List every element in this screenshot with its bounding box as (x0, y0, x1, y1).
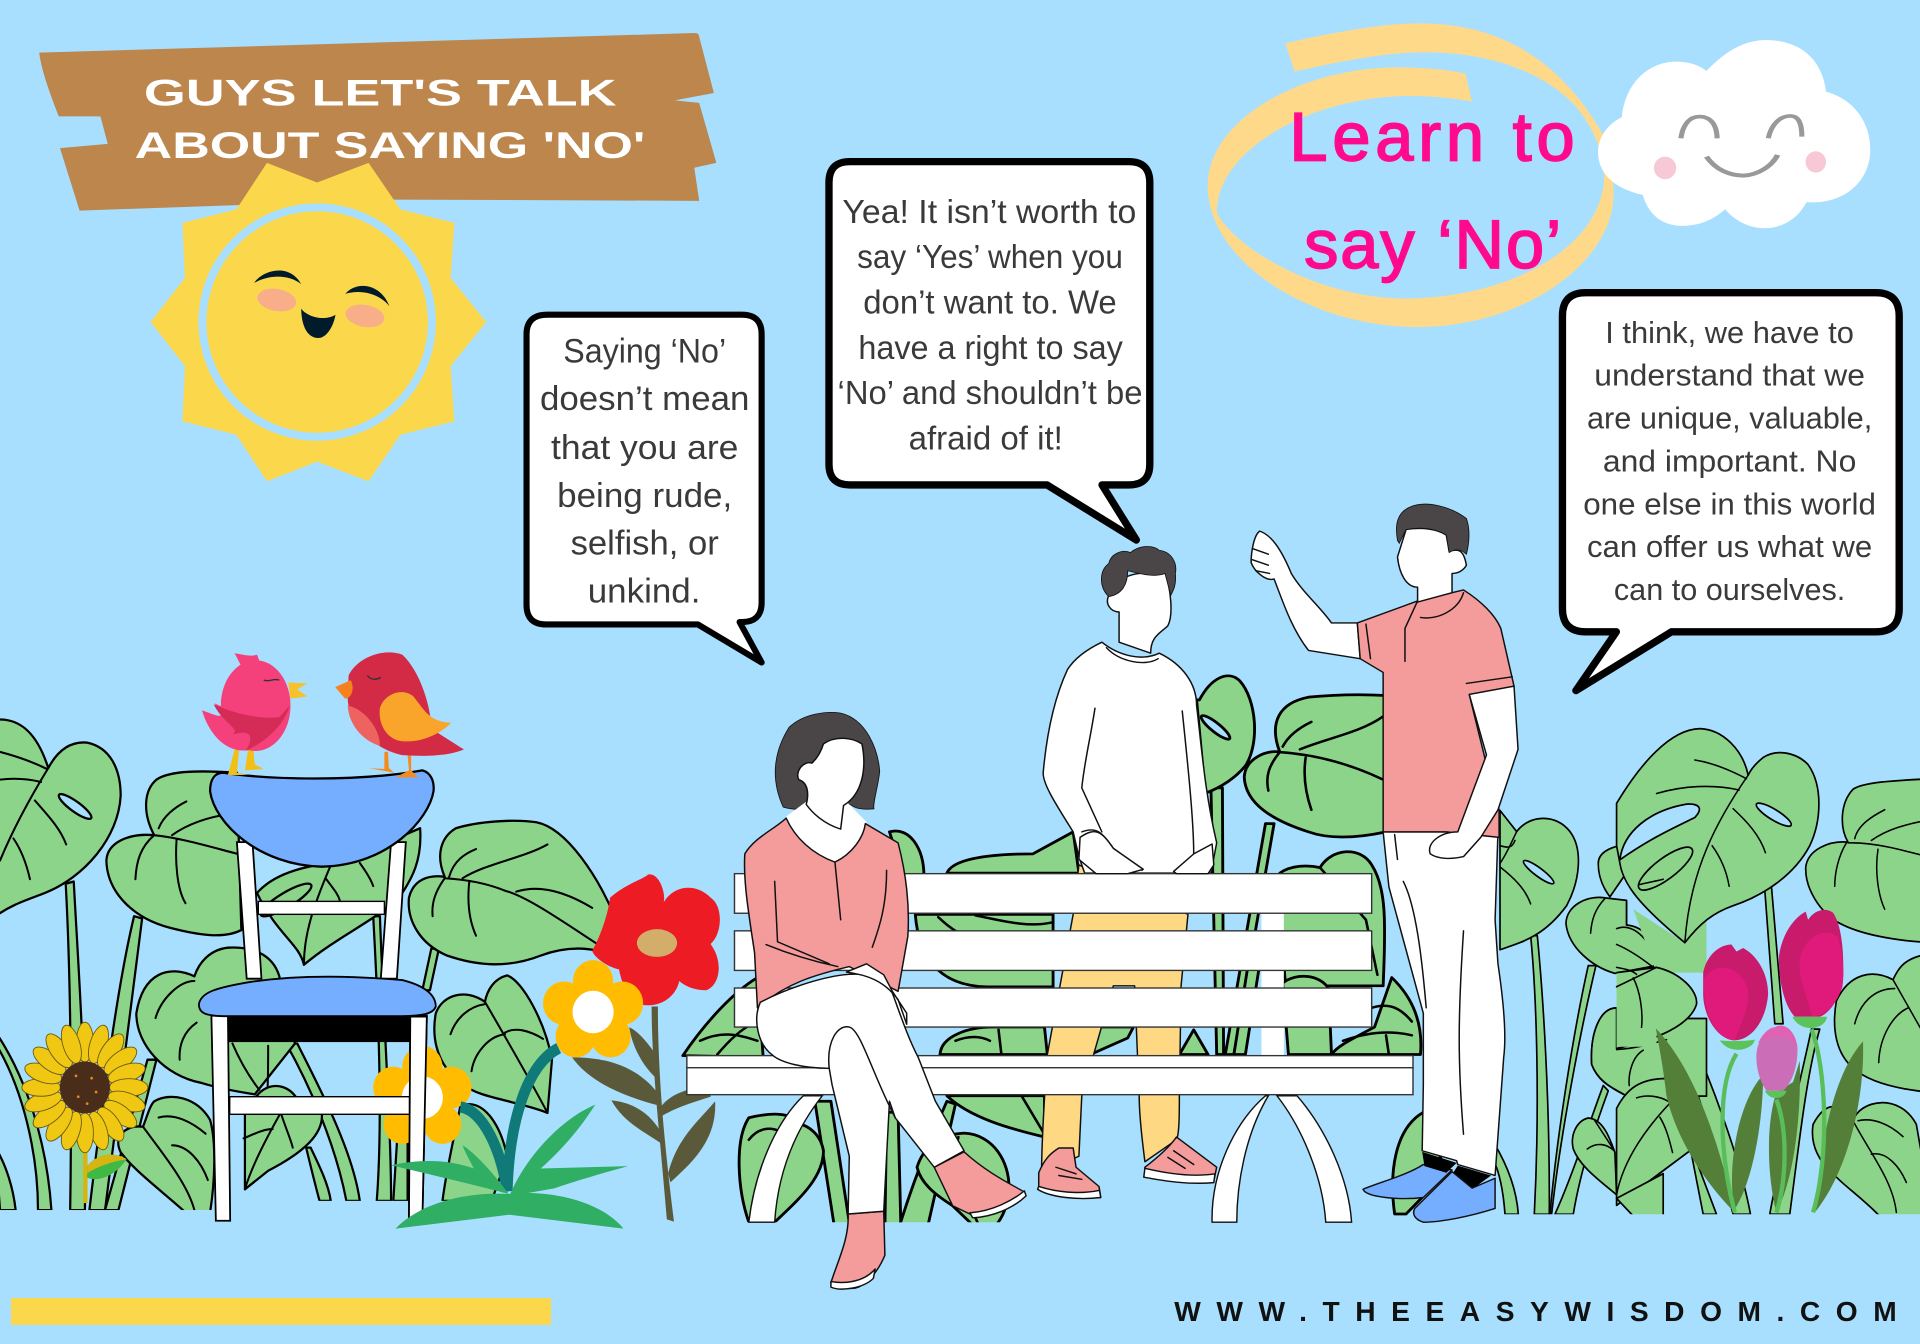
sweater (1043, 642, 1217, 873)
speech bubble 1: Saying ‘No’ (563, 332, 726, 370)
chair lower rail (230, 1097, 407, 1114)
grass (391, 1105, 628, 1229)
chair (210, 770, 434, 1221)
olive plant (572, 1006, 715, 1222)
plants: right foliage (1493, 729, 1920, 1220)
hair (1101, 546, 1176, 597)
speech bubble 1: doesn’t mean (540, 380, 749, 418)
speech bubble 3: and important. No (1603, 444, 1856, 478)
title: ABOUT SAYING 'NO' (135, 125, 645, 166)
chair rail over flower (230, 1097, 409, 1114)
speech bubble 3: I think, we have to (1605, 316, 1854, 350)
speech bubble 2: afraid of it! (909, 420, 1063, 457)
speech bubble 2 (829, 162, 1150, 540)
heading: Learn to say No: say ‘No’ (1304, 206, 1561, 283)
front sock (1453, 1166, 1491, 1189)
speech bubble 2: don’t want to. We (863, 284, 1117, 321)
trousers (1042, 865, 1188, 1173)
front boot (934, 1152, 1024, 1214)
large orange flower (543, 960, 643, 1057)
woman (745, 712, 1026, 1289)
speech bubble 3: can offer us what we (1587, 530, 1872, 564)
speech bubble 3: understand that we (1594, 359, 1865, 393)
chair seat (199, 977, 436, 1016)
chair front legs (211, 1016, 427, 1221)
man in white sweater (1038, 546, 1217, 1199)
neck and chest (786, 802, 867, 864)
chair leg over flower (409, 1017, 427, 1221)
trousers (1383, 832, 1505, 1175)
chair rear posts (237, 842, 406, 979)
title: GUYS LET'S TALK (144, 72, 617, 113)
chair backrest (210, 770, 434, 867)
head (1107, 571, 1171, 653)
shoes (1039, 1148, 1101, 1198)
speech bubble 1 (527, 315, 762, 662)
small orange flower (373, 1046, 472, 1144)
polo shirt (1357, 590, 1514, 837)
hands over bench (1079, 832, 1214, 874)
bench seat (687, 1056, 1413, 1068)
bench post (1261, 913, 1284, 1056)
man in polo shirt (1251, 504, 1518, 1222)
trousers (757, 974, 964, 1214)
tulip left (1703, 944, 1768, 1050)
swoosh around heading (1208, 23, 1614, 327)
speech bubble 3 (1562, 293, 1899, 691)
right arm (1430, 686, 1518, 858)
website footer: WWW.THEEASYWISDOM.COM (1174, 1296, 1897, 1327)
yellow footer bar (11, 1298, 551, 1325)
lower boot (831, 1211, 885, 1289)
hair (1396, 504, 1469, 554)
bench seat front (687, 1068, 1413, 1095)
speech bubble 1: that you are (551, 429, 738, 467)
bench (687, 874, 1413, 1222)
speech bubble 3: can to ourselves. (1614, 573, 1845, 607)
front shoe (1414, 1172, 1495, 1222)
speech bubble 2: say ‘Yes’ when you (857, 239, 1123, 276)
tulip leaves (1656, 1028, 1863, 1212)
hands on knee (846, 964, 907, 1024)
red flower (592, 874, 720, 1005)
chair apron (226, 1014, 411, 1042)
plants: middle foliage (683, 676, 1446, 1233)
speech bubble 2: ‘No’ and shouldn’t be (838, 375, 1142, 412)
icon: sun (151, 163, 486, 481)
icon: sunflower (22, 1022, 148, 1203)
chair back rail (258, 901, 384, 914)
flowers and grass (199, 874, 720, 1229)
bench lower slat (734, 988, 1372, 1027)
tulips (1656, 910, 1863, 1212)
plants: left foliage (0, 719, 619, 1212)
red bird (335, 652, 464, 777)
heading: Learn to say No: Learn to (1289, 98, 1575, 175)
head (1398, 528, 1466, 602)
raised arm (1251, 531, 1360, 659)
bench legs (749, 1096, 1352, 1222)
cloud (1598, 40, 1870, 228)
speech bubble 2: have a right to say (858, 330, 1123, 367)
speech bubble 3: are unique, valuable, (1587, 402, 1872, 436)
blouse (745, 818, 908, 1008)
speech bubble 2: Yea! It isn’t worth to (842, 194, 1136, 231)
birds (202, 652, 464, 777)
back sock (1422, 1152, 1457, 1173)
title (135, 72, 645, 166)
back shoe (1363, 1164, 1452, 1199)
bench top slat (734, 874, 1372, 913)
speech bubble 1: being rude, (557, 477, 732, 515)
tulip stems (1723, 1029, 1824, 1212)
hair (775, 712, 880, 809)
banner: wooden plank (39, 33, 716, 211)
tulip small (1756, 1026, 1797, 1098)
pink bird (202, 653, 307, 775)
people and bench (687, 504, 1518, 1289)
bench middle slat (734, 931, 1372, 970)
head (798, 738, 864, 829)
speech bubble 1: unkind. (588, 572, 700, 610)
speech bubble 1: selfish, or (571, 525, 719, 563)
tulip right (1779, 910, 1843, 1028)
speech bubble 3: one else in this world (1583, 487, 1876, 521)
heading: Learn to say No (1289, 98, 1575, 283)
teal stems (460, 1048, 559, 1192)
